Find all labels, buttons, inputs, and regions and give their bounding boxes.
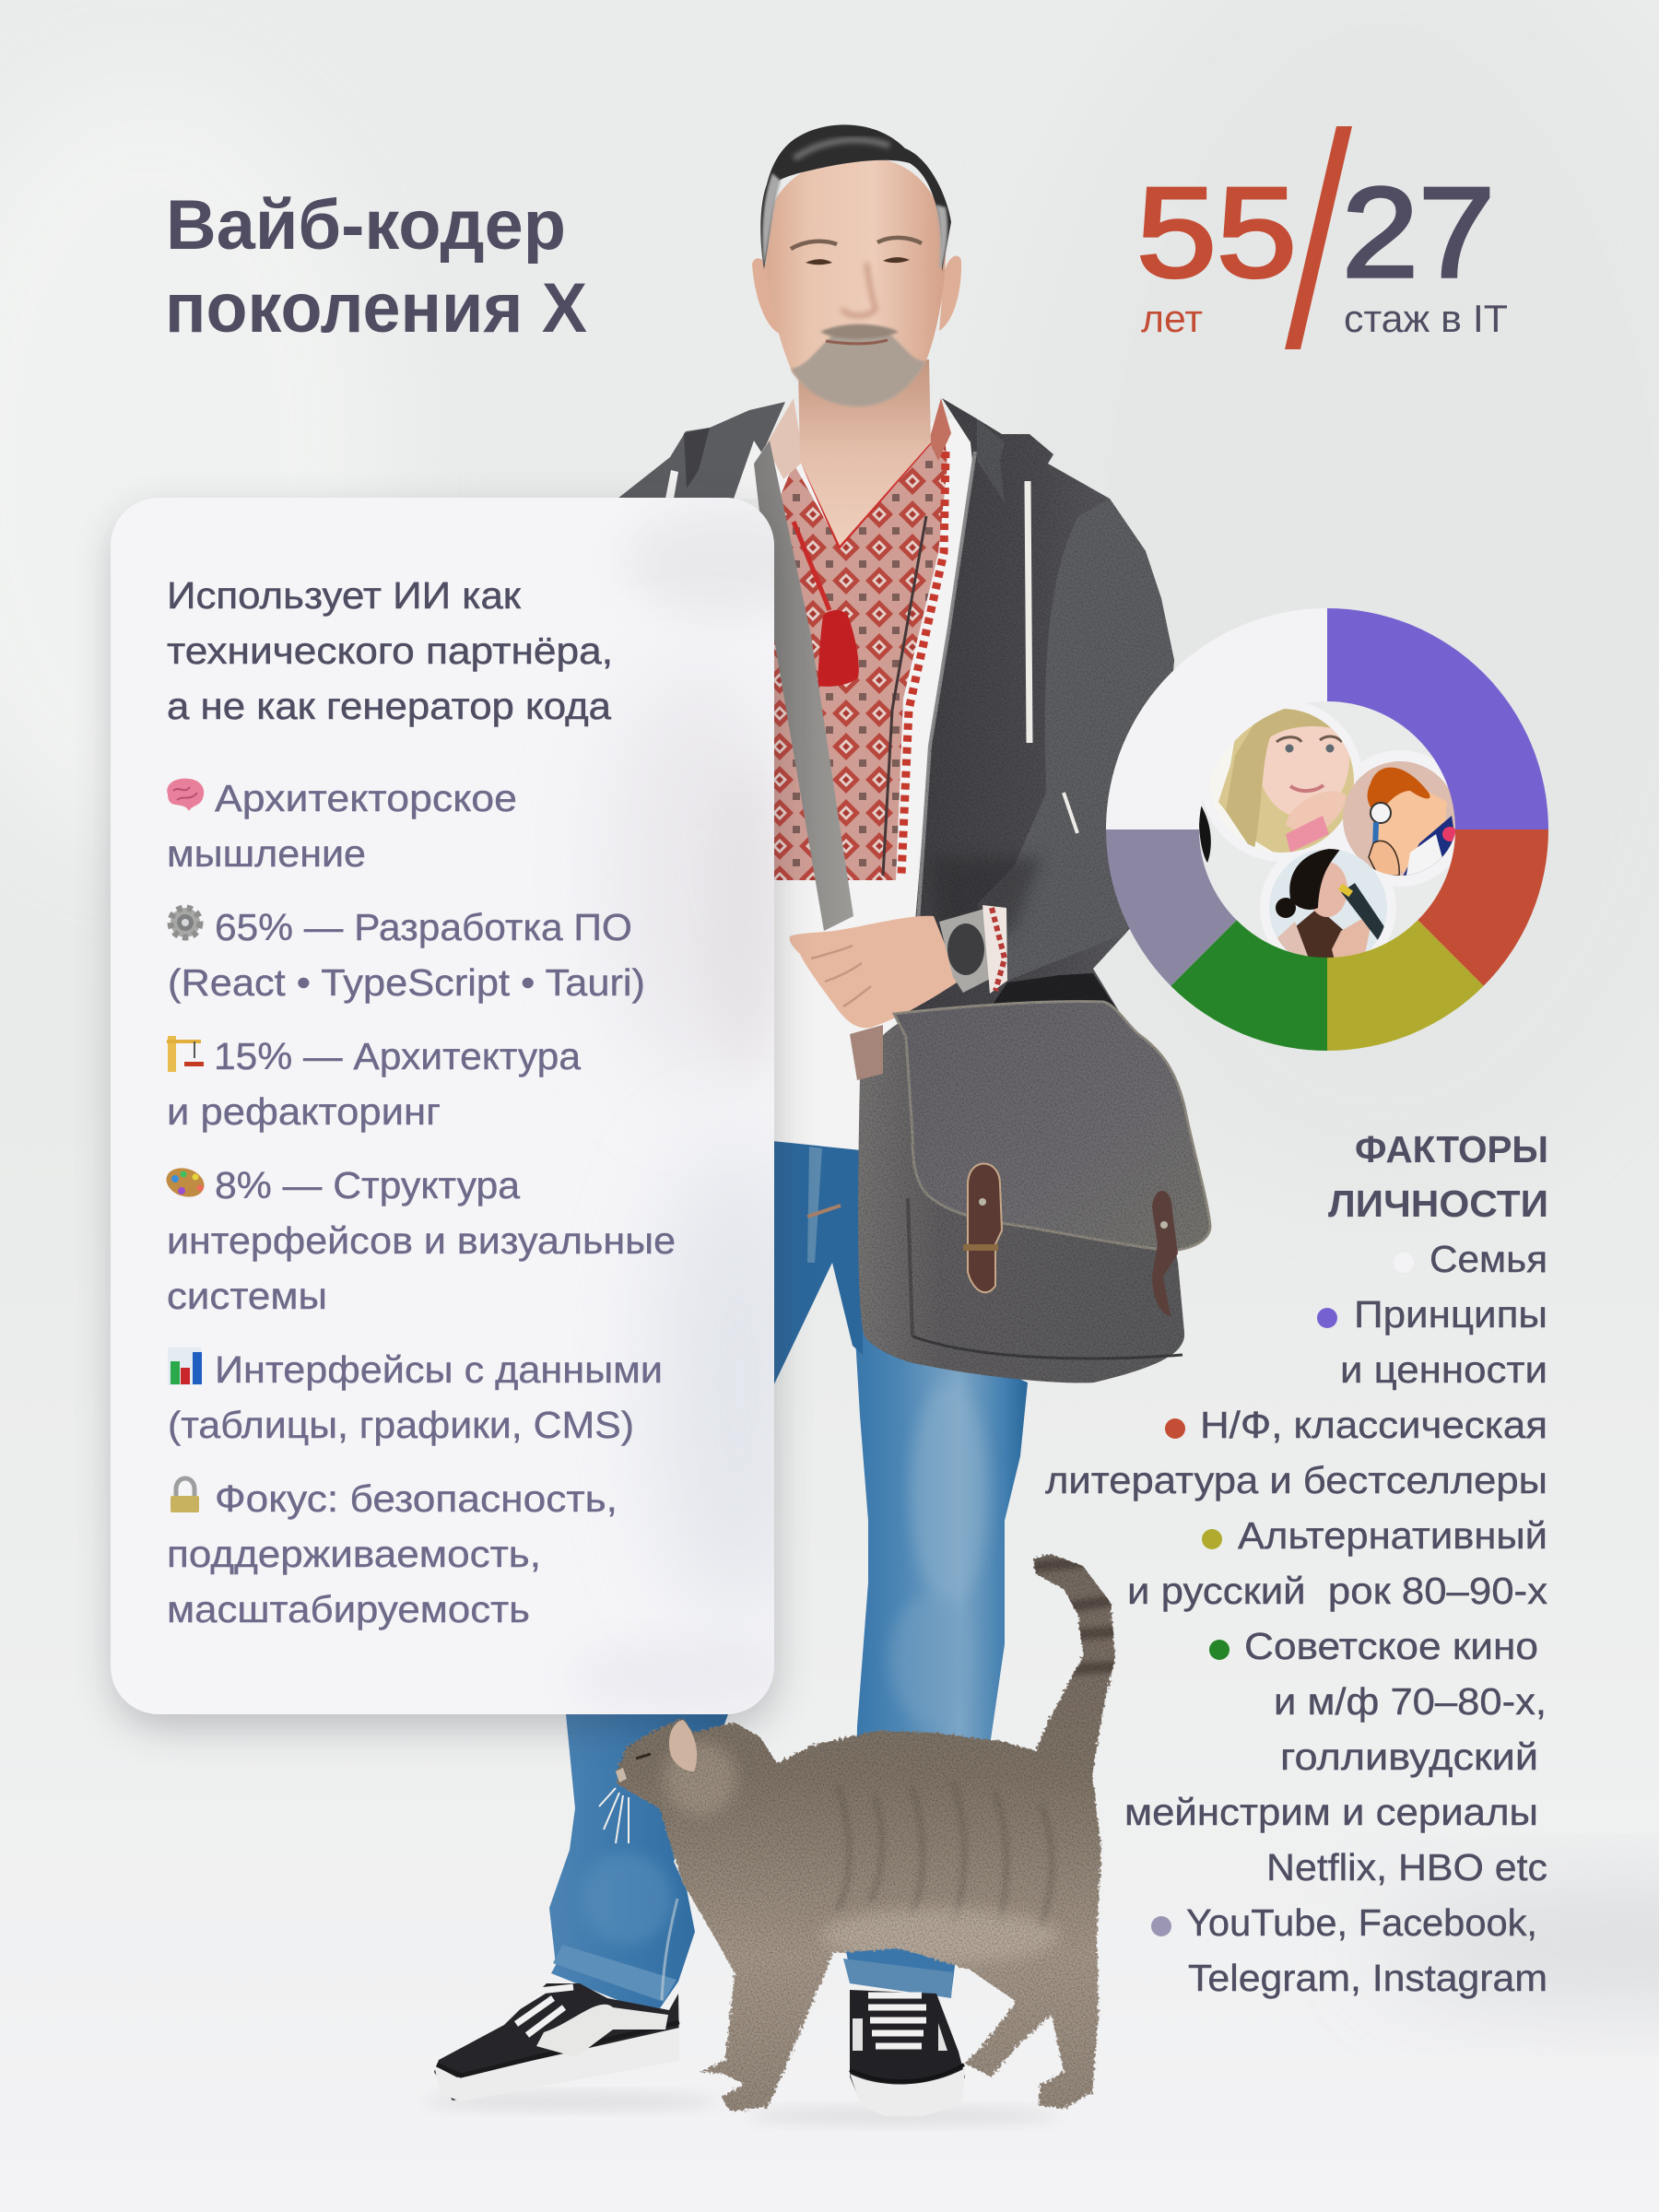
slash divider xyxy=(1285,126,1352,349)
photo: cartoon character xyxy=(1343,761,1455,876)
legend item: rock xyxy=(1127,1514,1548,1612)
legend item: literature: литература и бестселлеры xyxy=(1045,1459,1547,1501)
hoodie: left shoulder xyxy=(618,402,785,499)
legend item: rock: и русский рок 80–90-х xyxy=(1127,1570,1548,1612)
list item: software development xyxy=(168,906,645,1004)
legend item: cinema: и м/ф 70–80-х, xyxy=(1274,1680,1547,1723)
person: man in embroidered shirt and hoodie xyxy=(434,124,1217,2116)
face xyxy=(764,157,946,406)
stat: 27 years in IT xyxy=(1342,161,1508,340)
legend item: cinema: мейнстрим и сериалы xyxy=(1124,1791,1538,1833)
legend item: principles: и ценности xyxy=(1340,1348,1547,1391)
title: Вайб-кодер xyxy=(166,186,566,265)
left shoe xyxy=(434,1983,679,2101)
legend item: cinema: Netflix, HBO etc xyxy=(1266,1846,1547,1888)
stat: 27 years in IT: 27 xyxy=(1342,161,1495,304)
list item: interface structure: 8% — Структура xyxy=(215,1164,520,1206)
segment: cinema xyxy=(1171,920,1327,1051)
tassel xyxy=(794,522,859,687)
clasp right xyxy=(1152,1191,1178,1316)
legend item: cinema: Советское кино xyxy=(1244,1625,1538,1667)
eyes xyxy=(806,257,910,265)
list item: architecture and refactoring xyxy=(167,1035,581,1133)
bag body xyxy=(858,1023,1184,1382)
watch and cuff xyxy=(939,905,1007,994)
stat: 27 years in IT: стаж в IT xyxy=(1344,297,1508,340)
cat stripes, shading and fur grain xyxy=(608,1548,1124,2120)
legend item: social media: Telegram, Instagram xyxy=(1188,1957,1547,1999)
card shadow xyxy=(114,512,774,1727)
icon: bar chart xyxy=(168,1347,202,1385)
stat: 55 years: 55 xyxy=(1136,161,1297,304)
lead text: а не как генератор кода xyxy=(167,685,611,727)
list item: interface structure: интерфейсов и визуальные xyxy=(167,1219,676,1262)
legend item: family: Семья xyxy=(1430,1238,1547,1280)
grey temples xyxy=(762,173,947,269)
legend heading xyxy=(1328,1128,1548,1225)
cat xyxy=(599,1548,1124,2120)
cat body xyxy=(618,1554,1115,2112)
nose xyxy=(842,263,876,315)
card surface xyxy=(111,498,830,1714)
legend item: literature xyxy=(1045,1404,1547,1501)
legend item: social media xyxy=(1151,1901,1547,1999)
list item: software development: (React • TypeScript • Tauri) xyxy=(168,961,645,1004)
icon: gear xyxy=(171,908,200,937)
jeans: right leg xyxy=(832,1263,1028,1998)
lead text: технического партнёра, xyxy=(167,629,613,672)
cat face xyxy=(599,1754,651,1843)
bag flap xyxy=(894,1002,1210,1251)
list item: data interfaces: (таблицы, графики, CMS) xyxy=(168,1404,634,1446)
photo: singer with microphone xyxy=(1269,849,1387,958)
legend item: rock: Альтернативный xyxy=(1238,1514,1547,1557)
hair xyxy=(760,124,951,272)
card text xyxy=(162,574,676,1630)
donut hole xyxy=(1199,701,1455,958)
hoodie texture xyxy=(903,396,1180,1032)
segment: principles and values xyxy=(1327,608,1548,830)
list item: interface structure: системы xyxy=(167,1275,327,1317)
legend item: social media: YouTube, Facebook, xyxy=(1186,1901,1537,1944)
messenger bag xyxy=(850,1000,1217,1387)
clasp left xyxy=(963,1163,1002,1292)
list item: focus on security xyxy=(167,1477,618,1630)
segment: rock music xyxy=(1327,920,1484,1051)
legend item: cinema: голливудский xyxy=(1280,1735,1538,1778)
shirt: white base xyxy=(772,417,973,1150)
hand xyxy=(790,916,959,1028)
stats: age and IT experience xyxy=(1136,126,1508,349)
icon: brain xyxy=(167,779,204,811)
lead text xyxy=(167,574,613,727)
icon: palette xyxy=(162,1163,208,1202)
segment: family xyxy=(1106,608,1327,830)
list item: architecture thinking: мышление xyxy=(167,832,366,875)
neck xyxy=(798,359,931,546)
legend heading: ЛИЧНОСТИ xyxy=(1328,1182,1548,1225)
ears xyxy=(752,256,961,334)
personality donut chart xyxy=(1106,608,1548,1051)
segment: literature xyxy=(1418,830,1548,986)
floor shadows xyxy=(424,2092,1060,2125)
title xyxy=(165,186,587,347)
head xyxy=(752,124,961,406)
shirt: embroidery xyxy=(766,398,951,880)
legend item: literature: Н/Ф, классическая xyxy=(1200,1404,1547,1446)
list item: focus on security: Фокус: безопасность, xyxy=(215,1477,618,1520)
strap buckle xyxy=(850,1025,883,1080)
jeans: left leg lower xyxy=(549,1705,728,2008)
brows xyxy=(791,238,922,249)
segment: social media xyxy=(1106,830,1237,986)
icon: construction crane xyxy=(167,1036,204,1072)
title: поколения X xyxy=(165,269,587,347)
stat: 55 years: лет xyxy=(1141,297,1203,340)
shoulder strap xyxy=(754,441,853,931)
legend: personality factors xyxy=(1045,1128,1548,1999)
hoodie: torso and hood xyxy=(903,396,1180,1037)
icon: padlock xyxy=(171,1478,199,1512)
bag texture xyxy=(853,1000,1217,1387)
right shoe xyxy=(850,1990,965,2116)
legend heading: ФАКТОРЫ xyxy=(1355,1128,1548,1171)
cat ear xyxy=(669,1720,697,1771)
list item: data interfaces: Интерфейсы с данными xyxy=(215,1348,663,1391)
legend item: cinema xyxy=(1124,1625,1547,1888)
list item: architecture and refactoring: 15% — Архитектура xyxy=(214,1035,581,1077)
list item: focus on security: поддерживаемость, xyxy=(167,1533,541,1575)
info card xyxy=(111,498,830,1727)
mouth xyxy=(826,340,888,344)
list item: architecture thinking: Архитекторское xyxy=(215,777,517,819)
list item: software development: 65% — Разработка ПО xyxy=(215,906,632,948)
beard xyxy=(791,328,926,406)
legend item: principles xyxy=(1317,1293,1547,1391)
list item: architecture thinking xyxy=(167,777,517,875)
list item: architecture and refactoring: и рефакторинг xyxy=(167,1090,441,1133)
lead text: Использует ИИ как xyxy=(167,574,522,617)
list item: interface structure xyxy=(162,1163,676,1317)
list item: focus on security: масштабируемость xyxy=(167,1588,530,1630)
photo rings xyxy=(1201,700,1468,976)
photo: blonde woman xyxy=(1218,709,1354,853)
jeans: waist and left thigh xyxy=(772,1139,863,1388)
legend item: principles: Принципы xyxy=(1354,1293,1547,1335)
list item: data interfaces xyxy=(168,1347,663,1446)
